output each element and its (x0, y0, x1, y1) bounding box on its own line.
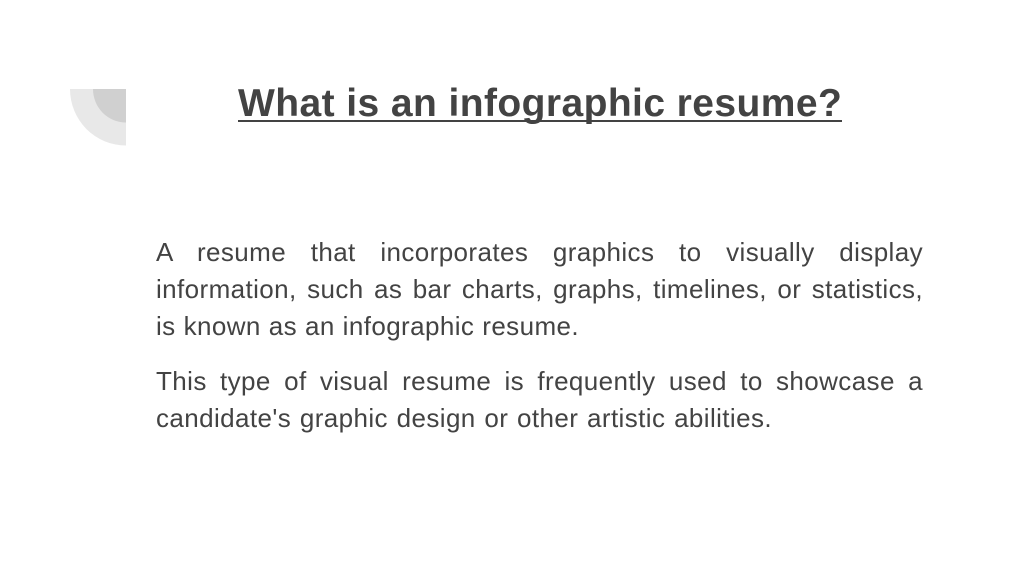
text block: first paragraph: information, such as bar charts, graphs, timelines, or statistics, (156, 274, 923, 304)
text block: second paragraph: candidate's graphic design or other artistic abilities. (156, 403, 772, 433)
text block: second paragraph (156, 366, 923, 433)
text block: first paragraph: A resume that incorporates graphics to visually display (156, 237, 923, 267)
title: What is an infographic resume? (238, 82, 842, 125)
icon: quarter circle decoration (70, 89, 126, 146)
text block: second paragraph: This type of visual resume is frequently used to showcase a (156, 366, 923, 396)
text block: first paragraph: is known as an infographic resume. (156, 311, 579, 341)
text block: first paragraph (156, 237, 923, 341)
